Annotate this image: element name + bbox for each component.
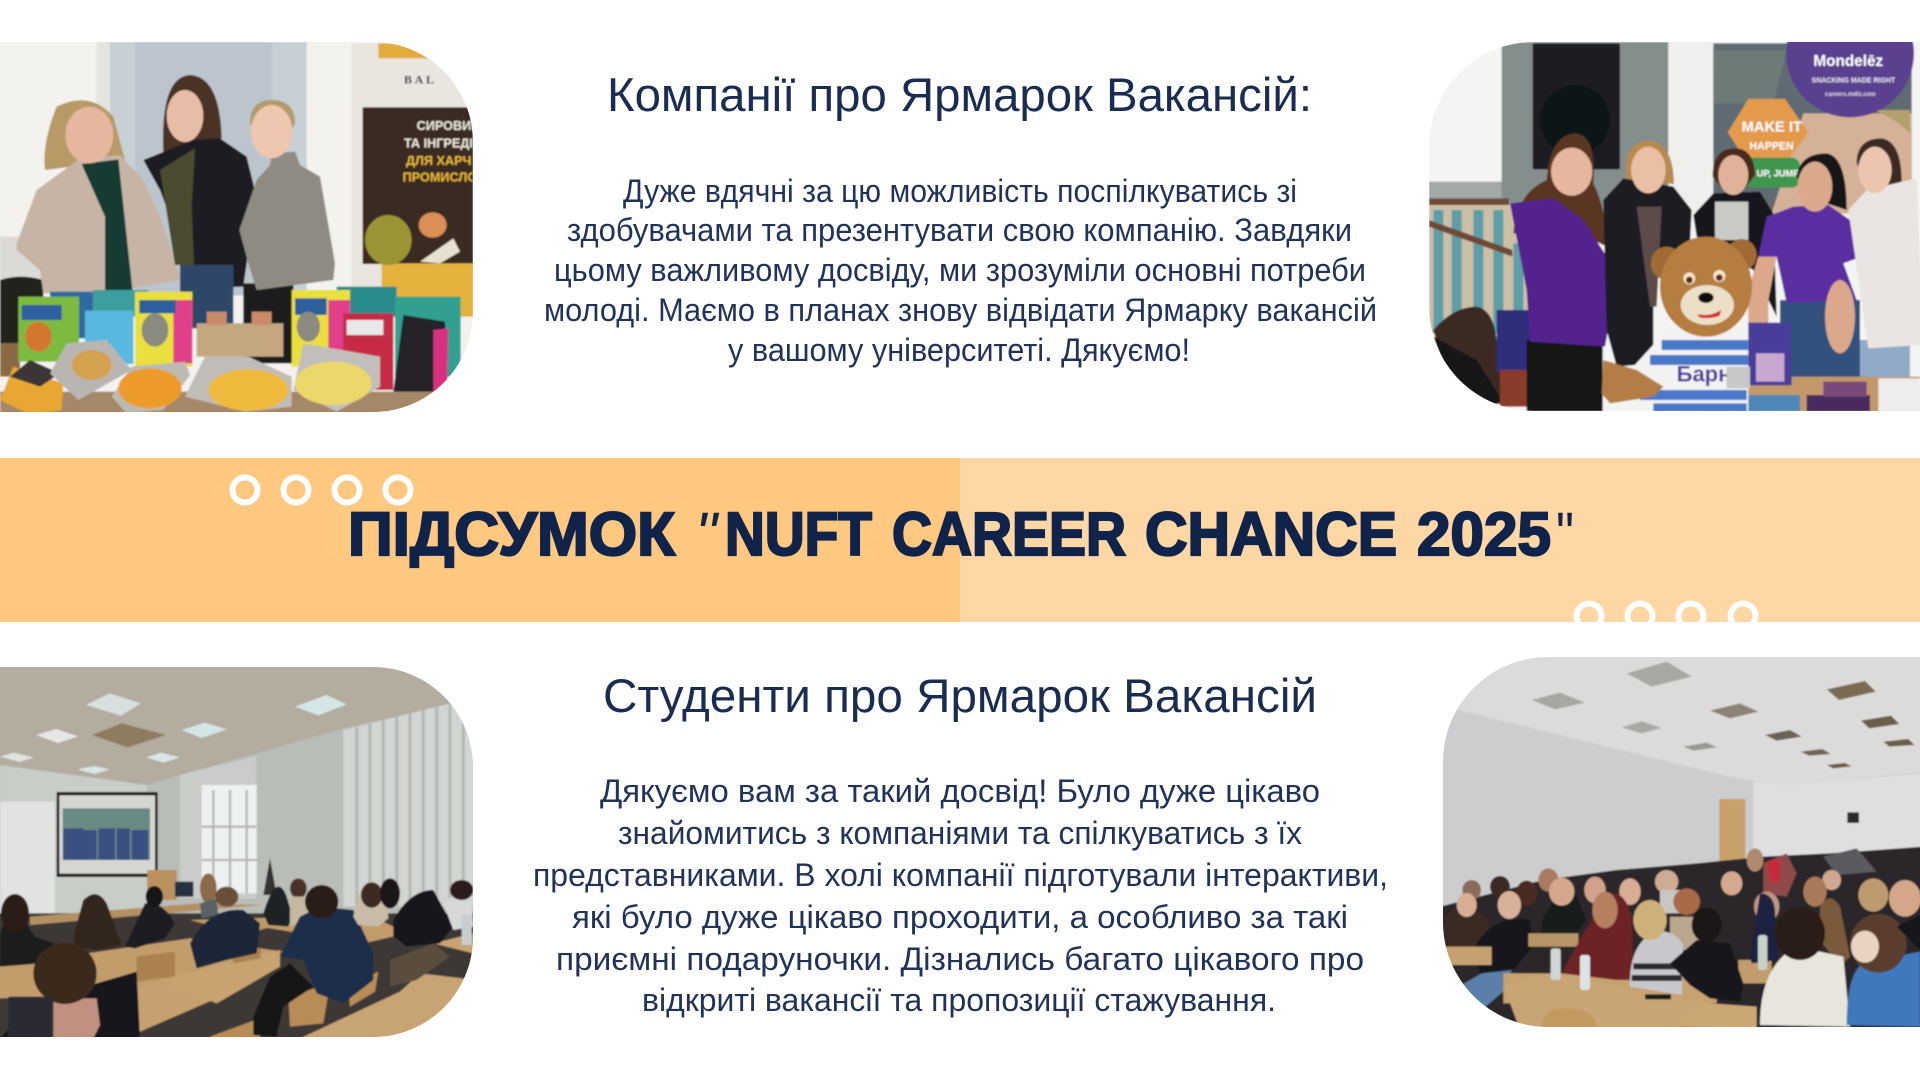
text block: companies' feedback: цьому важливому досвіду, ми зрозуміли основні потреби [554, 252, 1366, 288]
title: " [695, 500, 719, 568]
text block: companies' feedback [544, 173, 1377, 368]
text block: students' feedback: приємні подаруночки. Дізнались багато цікавого про [556, 941, 1364, 977]
photo: company representatives with cereal boxes and snacks: ТА ІНГРЕДІ [404, 136, 473, 150]
text block: students' feedback: які було дуже цікаво проходити, а особливо за такі [572, 899, 1348, 935]
text block: students' feedback: представниками. В холі компанії підготували інтерактиви, [533, 857, 1388, 893]
photo: company representatives with cereal boxes and snacks: ПРОМИСЛО [403, 171, 477, 185]
woman in white hoodie [1848, 138, 1920, 380]
woman centre [143, 75, 254, 328]
banner: two-tone title band [0, 458, 1920, 622]
photo: company representatives with cereal boxes and snacks: BAL [404, 72, 437, 86]
text block: companies' feedback: здобувачами та презентувати свою компанію. Завдяки [567, 212, 1352, 248]
photo: Mondelez team with bear mascot: Mondelēz [1813, 53, 1883, 70]
photo: Mondelez team with bear mascot: careers.mdlz.com [1825, 92, 1876, 98]
decorative circles: bottom row [1576, 604, 1756, 628]
photo: Mondelez team with bear mascot: HAPPEN [1749, 140, 1794, 152]
desks and chairs [0, 903, 477, 1040]
woman in purple hoodie [1510, 133, 1613, 347]
title: CAREER [892, 500, 1126, 568]
title: 2025 [1417, 500, 1551, 568]
heading: students about the job fair: Студенти про Ярмарок Вакансій [603, 669, 1317, 722]
woman left [17, 100, 182, 293]
title: CHANCE [1145, 500, 1397, 568]
photo: lecture room with projection screen [0, 665, 477, 1040]
text block: companies' feedback: Дуже вдячні за цю можливість поспілкуватись зі [623, 173, 1297, 209]
woman in purple t-shirt [1748, 153, 1862, 378]
text block: students' feedback: Дякуємо вам за такий досвід! Було дуже цікаво [600, 773, 1320, 809]
bear mascot [1602, 237, 1757, 412]
photo: Mondelez team with bear mascot: SNACKING MADE RIGHT [1812, 78, 1896, 85]
title: NUFT [725, 500, 872, 568]
crowd [1440, 847, 1920, 1030]
text block: students' feedback: знайомитись з компаніями та спілкуватись з їх [618, 815, 1302, 851]
title [348, 500, 1574, 568]
text block: students' feedback [533, 773, 1388, 1018]
text block: students' feedback: відкриті вакансії та пропозиції стажування. [642, 982, 1276, 1018]
decorative circles: top row [232, 478, 410, 502]
photo: company representatives with cereal boxes and snacks: СИРОВИН [417, 119, 480, 133]
photo: company representatives with cereal boxes and snacks: ДЛЯ ХАРЧ [406, 154, 472, 168]
heading: companies about the job fair: Компанії про Ярмарок Вакансій: [607, 68, 1312, 121]
audience [0, 873, 473, 1038]
title: " [1556, 500, 1574, 568]
title: ПІДСУМОК [348, 500, 676, 568]
photo: Mondelez team with bear mascot: UP, JUMP [1757, 169, 1800, 179]
woman in black puffer [1603, 141, 1692, 367]
woman right [239, 100, 335, 363]
bear mascot: Барн [1677, 362, 1731, 387]
photo: crowded auditorium of students [1440, 655, 1920, 1032]
text block: companies' feedback: у вашому університеті. Дякуємо! [728, 332, 1190, 368]
photo: company representatives with cereal boxes and snacks [0, 40, 480, 415]
text block: companies' feedback: молоді. Маємо в планах знову відвідати Ярмарку вакансій [544, 292, 1377, 328]
woman in black coat [1693, 148, 1777, 317]
photo: Mondelez team with bear mascot [1429, 42, 1920, 411]
photo: Mondelez team with bear mascot: MAKE IT [1742, 120, 1802, 136]
